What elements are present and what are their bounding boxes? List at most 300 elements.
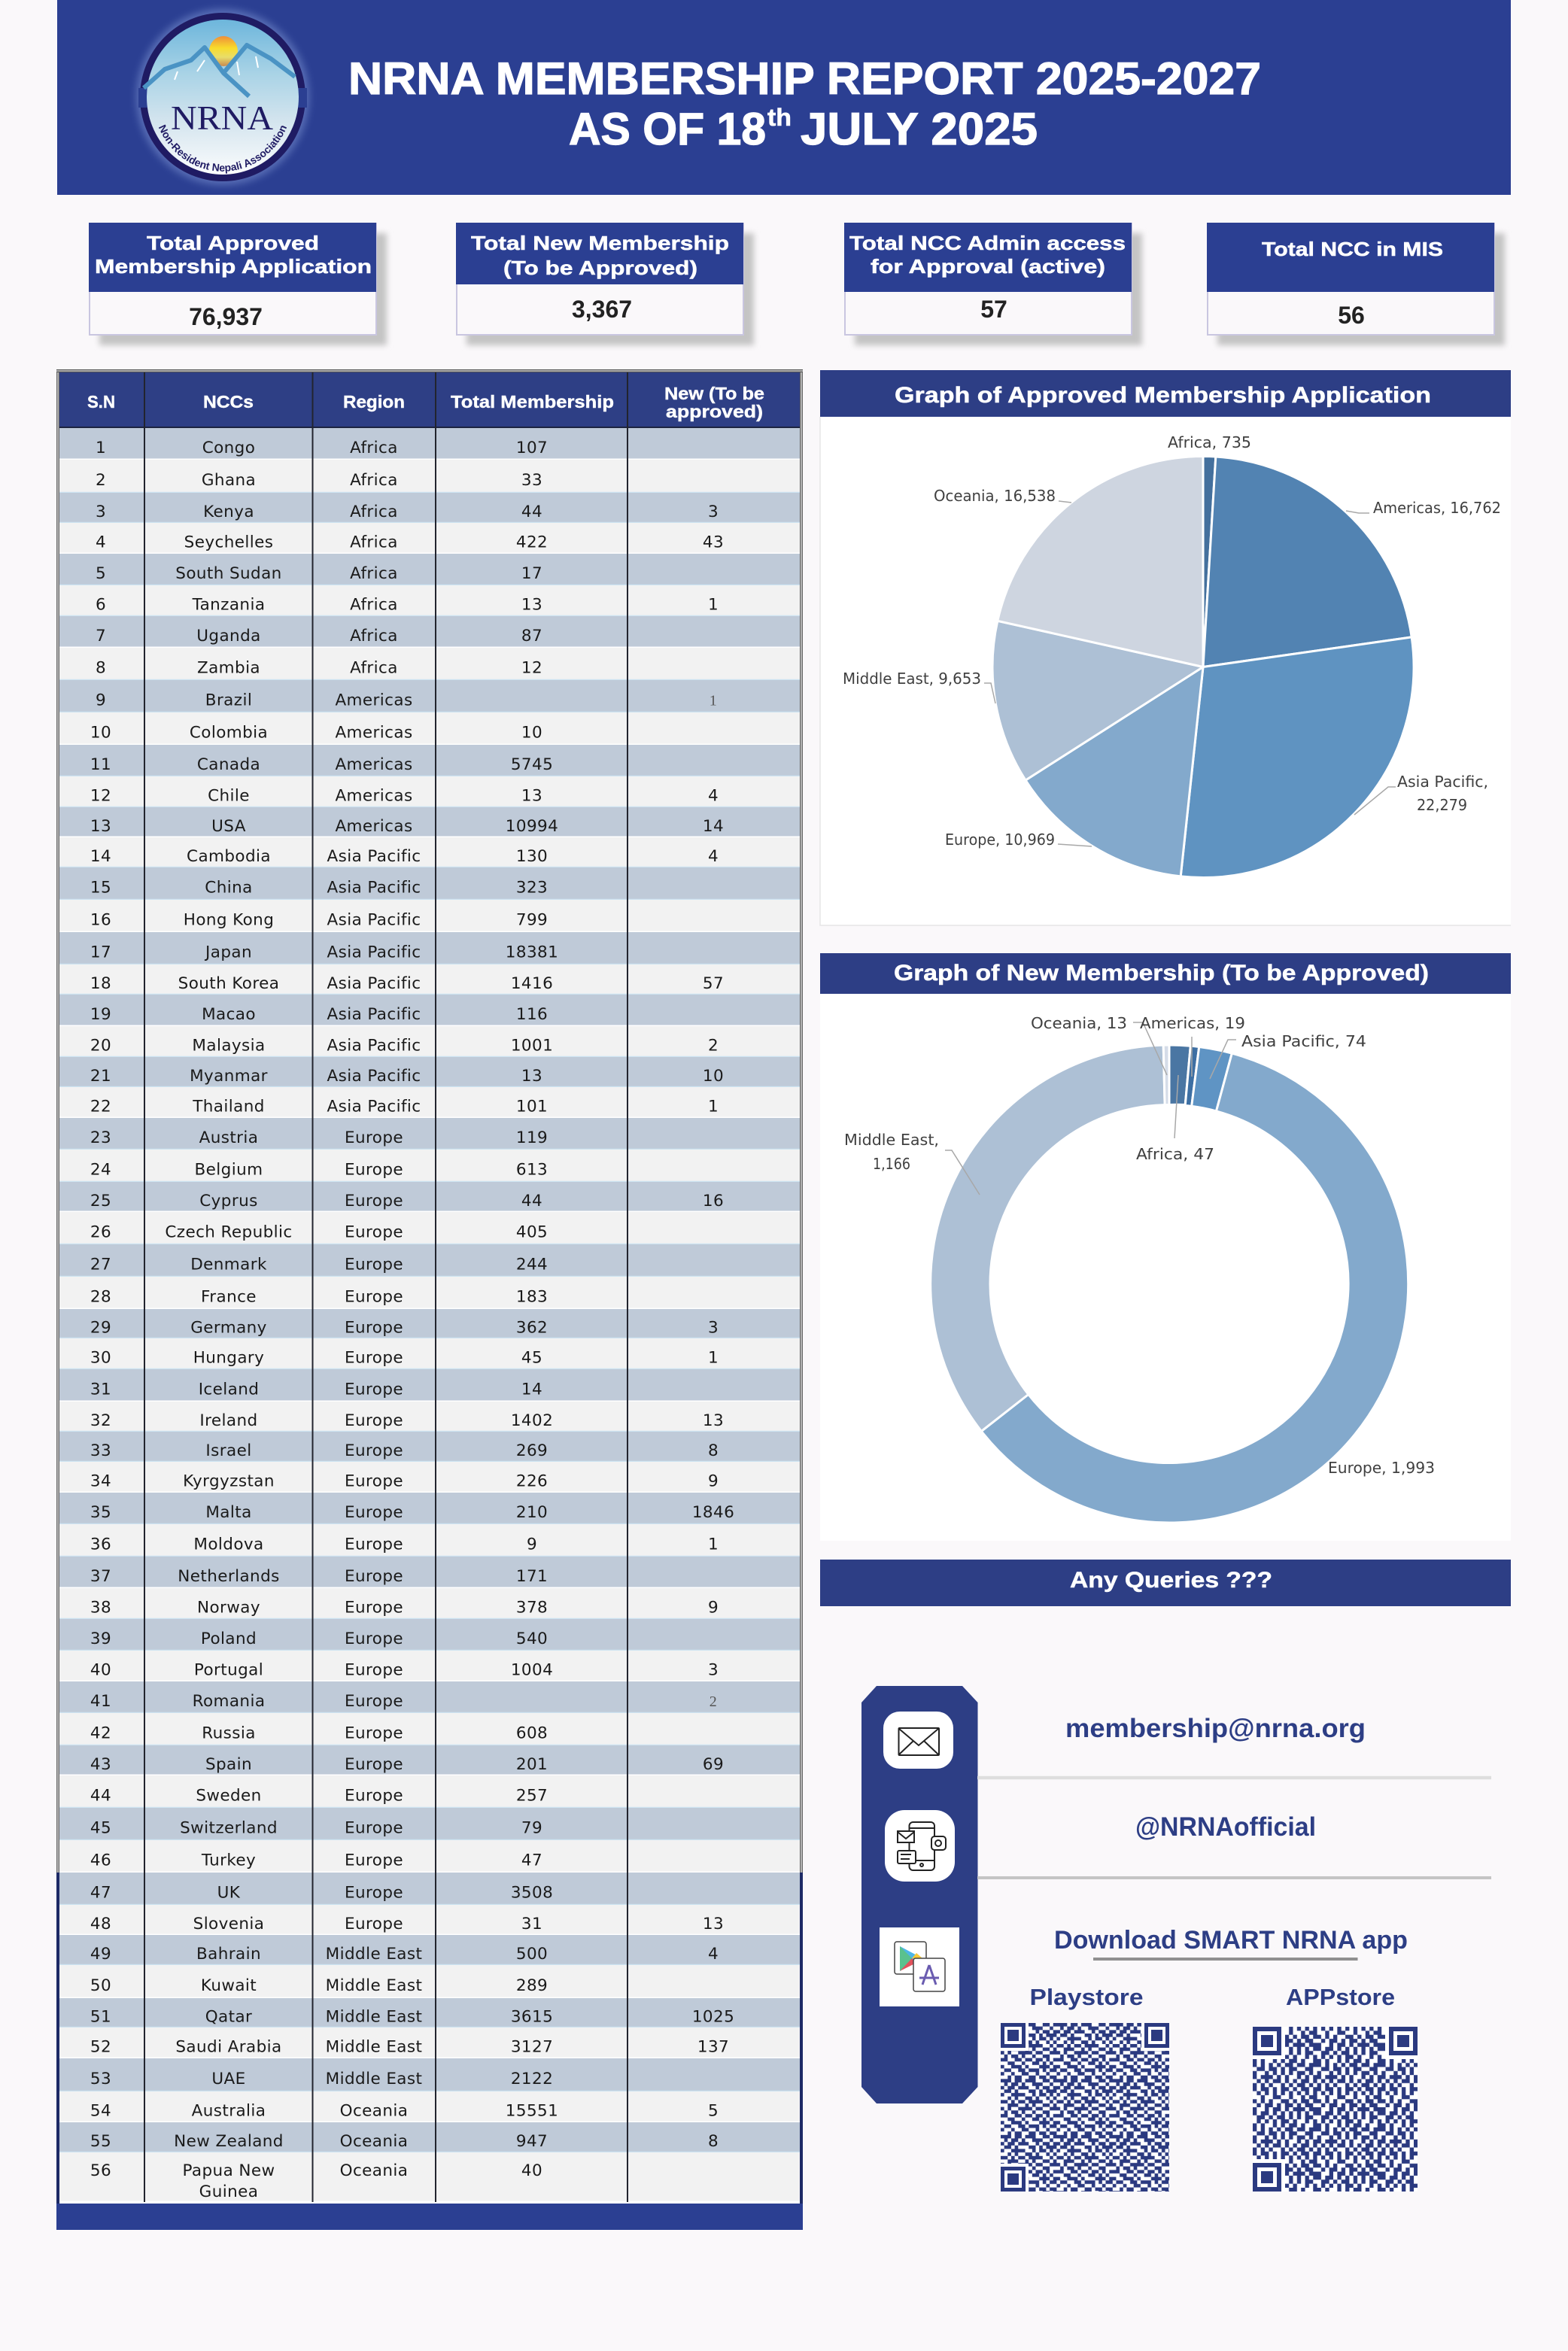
row 47: 3508 xyxy=(511,1884,553,1902)
stat card: NCC admin access: Total NCC Admin access xyxy=(849,232,1126,254)
row 8: Africa xyxy=(350,659,398,677)
row 15: China xyxy=(205,879,253,897)
row 24: 613 xyxy=(516,1160,548,1180)
row 49: Middle East xyxy=(326,1945,422,1964)
row 33: Israel xyxy=(205,1441,252,1460)
row 22: Thailand xyxy=(192,1097,265,1116)
row 36: 9 xyxy=(527,1535,537,1554)
row 1: Africa xyxy=(350,439,398,457)
row 41: Europe xyxy=(345,1692,403,1711)
row 1: Congo xyxy=(202,439,255,457)
row 42: Russia xyxy=(202,1724,256,1742)
stat card: NCC admin access: 57 xyxy=(980,296,1007,323)
row 54: Australia xyxy=(192,2102,266,2120)
row 20: 2 xyxy=(708,1037,719,1055)
row 40: 3 xyxy=(708,1661,719,1679)
row 2: 33 xyxy=(521,471,542,490)
row 4: 4 xyxy=(96,533,106,552)
row 30: Europe xyxy=(345,1348,403,1368)
row 26: Czech Republic xyxy=(165,1223,293,1241)
row 9: Brazil xyxy=(205,691,252,710)
row 9: Americas xyxy=(335,691,413,710)
row 4 xyxy=(59,523,800,554)
row 39: 39 xyxy=(90,1630,111,1648)
row 24: Belgium xyxy=(195,1160,263,1180)
row 35 xyxy=(59,1493,800,1524)
row 32: Ireland xyxy=(199,1411,258,1430)
row 52 xyxy=(59,2028,800,2058)
row 23: Austria xyxy=(199,1128,258,1147)
row 48: 48 xyxy=(90,1915,111,1933)
row 25: 25 xyxy=(90,1192,111,1210)
row 33: 8 xyxy=(708,1441,719,1460)
stat card: total new membership: Total New Membership xyxy=(471,232,729,254)
row 39: 540 xyxy=(516,1630,548,1648)
row 51: 3615 xyxy=(511,2007,553,2027)
donut labels xyxy=(844,1014,1435,1477)
pie labels: Americas, 16,762 xyxy=(1373,499,1501,517)
row 40: 40 xyxy=(90,1661,111,1679)
row 27: 244 xyxy=(516,1255,548,1274)
row 11: 5745 xyxy=(511,755,553,774)
row 20: Asia Pacific xyxy=(327,1037,421,1055)
stat card: NCC in MIS: 56 xyxy=(1338,302,1365,329)
row 38 xyxy=(59,1588,800,1619)
row 32: 13 xyxy=(703,1411,724,1430)
row 5: 5 xyxy=(96,564,106,583)
row 41 xyxy=(59,1681,800,1713)
row 7: 87 xyxy=(521,627,542,645)
row 15: Asia Pacific xyxy=(327,879,421,897)
row 42: Europe xyxy=(345,1724,403,1742)
row 12: Americas xyxy=(335,787,413,805)
row 51: 51 xyxy=(90,2007,111,2027)
row 1: 1 xyxy=(96,439,106,457)
row 43 xyxy=(59,1745,800,1775)
row 6: Africa xyxy=(350,596,398,614)
row 55 xyxy=(59,2122,800,2152)
panel: approved membership graph xyxy=(820,370,1511,925)
row 26 xyxy=(59,1212,800,1244)
row 17: Asia Pacific xyxy=(327,943,421,961)
heading: any queries xyxy=(820,1560,1511,1606)
row 51: Qatar xyxy=(205,2007,252,2027)
row 26: 26 xyxy=(90,1223,111,1241)
row 34: 34 xyxy=(90,1472,111,1491)
row 6: 1 xyxy=(708,596,719,614)
stat card: total new membership: 3,367 xyxy=(572,296,632,323)
row 43: 43 xyxy=(90,1755,111,1774)
row 55: 55 xyxy=(90,2132,111,2151)
row 25: Europe xyxy=(345,1192,403,1210)
row 25: 44 xyxy=(521,1192,542,1210)
row 20: Malaysia xyxy=(192,1037,266,1055)
pie chart: approved membership by region xyxy=(992,456,1414,877)
stat card: NCC in MIS: Total NCC in MIS xyxy=(1262,238,1443,260)
row 10: 10 xyxy=(90,724,111,742)
row 38: 378 xyxy=(516,1598,548,1617)
row 45 xyxy=(59,1808,800,1840)
icon: app stores xyxy=(880,1927,959,2006)
row 12: 12 xyxy=(90,787,111,805)
row 56: 56 xyxy=(90,2161,111,2180)
row 6: 6 xyxy=(96,596,106,614)
row 22: 1 xyxy=(708,1097,719,1116)
row 11: 11 xyxy=(90,755,111,774)
row 30: 45 xyxy=(521,1348,542,1368)
row 18: 57 xyxy=(703,974,724,993)
row 5: Africa xyxy=(350,564,398,583)
row 4: 43 xyxy=(703,533,724,552)
row 32: 32 xyxy=(90,1411,111,1430)
row 16: 16 xyxy=(90,910,111,930)
row 56: Oceania xyxy=(340,2161,408,2180)
row 47: 47 xyxy=(90,1884,111,1902)
row 44: Europe xyxy=(345,1786,403,1806)
table header row: S.N xyxy=(87,392,115,412)
row 5: South Sudan xyxy=(175,564,282,583)
row 8 xyxy=(59,648,800,680)
pie labels: Oceania, 16,538 xyxy=(934,487,1056,505)
row 31: Iceland xyxy=(199,1380,259,1399)
row 19 xyxy=(59,995,800,1026)
row 21: 21 xyxy=(90,1067,111,1086)
row 29: 362 xyxy=(516,1318,548,1338)
row 43: 69 xyxy=(703,1755,724,1774)
row 12: 4 xyxy=(708,787,719,805)
row 21 xyxy=(59,1057,800,1087)
row 19: 19 xyxy=(90,1005,111,1024)
table header row: approved) xyxy=(666,402,763,421)
row 7: Uganda xyxy=(196,627,261,645)
row 24 xyxy=(59,1150,800,1182)
title xyxy=(348,53,1261,154)
row 25: 16 xyxy=(703,1192,724,1210)
row 53: 2122 xyxy=(511,2070,553,2088)
row 45: Switzerland xyxy=(180,1819,278,1837)
table header row xyxy=(59,372,800,429)
row 21: Myanmar xyxy=(190,1067,268,1086)
row 2 xyxy=(59,460,800,493)
row 51: 1025 xyxy=(692,2007,734,2027)
row 37 xyxy=(59,1557,800,1588)
row 54: Oceania xyxy=(340,2102,408,2120)
label: appstore: APPstore xyxy=(1286,1984,1395,2010)
row 48: 31 xyxy=(521,1915,542,1933)
row 51: Middle East xyxy=(326,2007,422,2027)
row 41: 2 xyxy=(710,1693,717,1710)
row 49: 49 xyxy=(90,1945,111,1964)
row 35: 210 xyxy=(516,1503,548,1522)
panel: new membership graph xyxy=(820,953,1511,1541)
row 50: Middle East xyxy=(326,1976,422,1995)
row 23 xyxy=(59,1118,800,1150)
row 23: Europe xyxy=(345,1128,403,1147)
row 20: 1001 xyxy=(511,1037,553,1055)
row 44 xyxy=(59,1775,800,1808)
row 29: Europe xyxy=(345,1318,403,1338)
row 42 xyxy=(59,1713,800,1745)
row 9: 1 xyxy=(710,692,717,709)
row 23: 23 xyxy=(90,1128,111,1147)
row 17 xyxy=(59,932,800,964)
table footer bar xyxy=(56,2204,803,2230)
donut labels: Oceania, 13 xyxy=(1031,1014,1127,1032)
row 44: 44 xyxy=(90,1786,111,1806)
row 56: Papua New xyxy=(183,2161,275,2180)
donut labels: Americas, 19 xyxy=(1140,1014,1245,1032)
row 55: 947 xyxy=(516,2132,548,2151)
row 36 xyxy=(59,1524,800,1557)
row 52: 137 xyxy=(697,2037,729,2057)
row 37: Europe xyxy=(345,1567,403,1586)
row 21: 13 xyxy=(521,1067,542,1086)
row 30: 1 xyxy=(708,1348,719,1368)
row 29 xyxy=(59,1309,800,1338)
row 30: 30 xyxy=(90,1348,111,1368)
row 17: Japan xyxy=(204,943,252,961)
table header row: Region xyxy=(343,392,405,412)
row 54 xyxy=(59,2091,800,2122)
row 33 xyxy=(59,1432,800,1462)
row 14: 14 xyxy=(90,847,111,866)
row 54: 5 xyxy=(708,2102,719,2120)
row 35: 35 xyxy=(90,1503,111,1522)
row 34: 226 xyxy=(516,1472,548,1491)
row 48: Europe xyxy=(345,1915,403,1933)
row 38: 9 xyxy=(708,1598,719,1617)
membership table xyxy=(56,369,803,2230)
row 3: Africa xyxy=(350,503,398,521)
row 35: Europe xyxy=(345,1503,403,1522)
row 25 xyxy=(59,1182,800,1212)
row 18 xyxy=(59,964,800,995)
row 49: 4 xyxy=(708,1945,719,1964)
QR code: appstore xyxy=(1253,2027,1418,2192)
contact: social handle: @NRNAofficial xyxy=(1135,1812,1316,1842)
row 10: Americas xyxy=(335,724,413,742)
row 44: Sweden xyxy=(196,1786,262,1806)
row 15 xyxy=(59,867,800,900)
row 6: 13 xyxy=(521,596,542,614)
row 40: 1004 xyxy=(511,1661,553,1679)
row 46 xyxy=(59,1840,800,1873)
row 48: Slovenia xyxy=(193,1915,264,1933)
contact: email: membership@nrna.org xyxy=(1065,1714,1366,1743)
pie labels: Asia Pacific, xyxy=(1397,773,1488,791)
row 30: Hungary xyxy=(193,1348,264,1368)
logo: NRNA emblem: Non-Resident Nepali Association xyxy=(158,125,287,174)
row 43: 201 xyxy=(516,1755,548,1774)
row 50 xyxy=(59,1965,800,1998)
row 27: 27 xyxy=(90,1255,111,1274)
donut labels: Africa, 47 xyxy=(1136,1145,1214,1163)
row 56: 40 xyxy=(521,2161,542,2180)
row 45: Europe xyxy=(345,1819,403,1837)
table header row: New (To be xyxy=(664,384,764,403)
row 13: Americas xyxy=(335,817,413,836)
row 27 xyxy=(59,1244,800,1277)
header banner xyxy=(57,0,1511,195)
row 26: 405 xyxy=(516,1223,548,1241)
row 7: 7 xyxy=(96,627,106,645)
row 22: 22 xyxy=(90,1097,111,1116)
row 12: 13 xyxy=(521,787,542,805)
row 17: 17 xyxy=(90,943,111,961)
row 18: 1416 xyxy=(511,974,553,993)
row 41: 41 xyxy=(90,1692,111,1711)
row 38: 38 xyxy=(90,1598,111,1617)
row 23: 119 xyxy=(516,1128,548,1147)
row 4: Africa xyxy=(350,533,398,552)
row 22: Asia Pacific xyxy=(327,1097,421,1116)
panel: contact side bar xyxy=(861,1686,978,2103)
row 31: Europe xyxy=(345,1380,403,1399)
title: JULY 2025 xyxy=(801,104,1038,154)
row 39 xyxy=(59,1619,800,1651)
row 50: 50 xyxy=(90,1976,111,1995)
title: NRNA MEMBERSHIP REPORT 2025-2027 xyxy=(348,53,1261,104)
row 14 xyxy=(59,837,800,867)
row 55: New Zealand xyxy=(174,2132,284,2151)
row 39: Europe xyxy=(345,1630,403,1648)
row 54: 54 xyxy=(90,2102,111,2120)
row 21: Asia Pacific xyxy=(327,1067,421,1086)
row 13: 10994 xyxy=(506,817,558,836)
row 35: Malta xyxy=(205,1503,252,1522)
row 13: 14 xyxy=(703,817,724,836)
row 38: Europe xyxy=(345,1598,403,1617)
row 27: Denmark xyxy=(190,1255,267,1274)
row 47 xyxy=(59,1873,800,1905)
row 3: 44 xyxy=(521,503,542,521)
row 12 xyxy=(59,776,800,807)
row 14: 130 xyxy=(516,847,548,866)
row 6 xyxy=(59,585,800,616)
row 15: 15 xyxy=(90,879,111,897)
row 13: USA xyxy=(211,817,246,836)
row 28: 28 xyxy=(90,1288,111,1306)
row 16: Asia Pacific xyxy=(327,910,421,930)
row 33: 269 xyxy=(516,1441,548,1460)
row 56 xyxy=(59,2152,800,2202)
row 12: Chile xyxy=(208,787,250,805)
row 33: 33 xyxy=(90,1441,111,1460)
row 16: Hong Kong xyxy=(184,910,274,930)
row 22 xyxy=(59,1087,800,1118)
donut chart: new membership by region xyxy=(931,1045,1408,1523)
heading: any queries: Any Queries ??? xyxy=(1070,1568,1272,1593)
donut labels: Europe, 1,993 xyxy=(1328,1459,1435,1477)
row 53: UAE xyxy=(211,2070,246,2088)
title: AS OF 18 xyxy=(569,104,766,154)
title: th xyxy=(767,104,792,131)
row 3: 3 xyxy=(96,503,106,521)
row 36: 36 xyxy=(90,1535,111,1554)
row 17: 18381 xyxy=(506,943,558,961)
row 24: 24 xyxy=(90,1160,111,1180)
stat card: NCC in MIS xyxy=(1207,223,1505,345)
divider lines xyxy=(977,1776,1491,1779)
row 36: Europe xyxy=(345,1535,403,1554)
row 31: 31 xyxy=(90,1380,111,1399)
row 52: 3127 xyxy=(511,2037,553,2057)
row 11: Americas xyxy=(335,755,413,774)
donut labels: 1,166 xyxy=(873,1155,910,1173)
row 46: 47 xyxy=(521,1851,542,1870)
logo: NRNA emblem xyxy=(133,6,312,188)
row 8: Zambia xyxy=(197,659,260,677)
pie labels: Middle East, 9,653 xyxy=(843,670,981,688)
stat card: total approved: Membership Application xyxy=(95,255,372,278)
row 47: UK xyxy=(217,1884,241,1902)
pie labels: Europe, 10,969 xyxy=(945,831,1055,849)
row 46: Europe xyxy=(345,1851,403,1870)
icon: mail xyxy=(883,1712,953,1769)
logo: NRNA emblem: NRNA xyxy=(171,99,274,137)
row 52: Saudi Arabia xyxy=(175,2037,282,2057)
row 29: Germany xyxy=(190,1318,267,1338)
row 13: 13 xyxy=(90,817,111,836)
row 55: Oceania xyxy=(340,2132,408,2151)
row 29: 29 xyxy=(90,1318,111,1338)
row 31: 14 xyxy=(521,1380,542,1399)
row 6: Tanzania xyxy=(192,596,265,614)
stat card: total approved: Total Approved xyxy=(147,232,319,254)
row 15: 323 xyxy=(516,879,548,897)
row 16: 799 xyxy=(516,910,548,930)
row 34: Europe xyxy=(345,1472,403,1491)
row 43: Europe xyxy=(345,1755,403,1774)
heading: new membership graph xyxy=(820,953,1511,994)
row 18: Asia Pacific xyxy=(327,974,421,993)
row 10: Colombia xyxy=(190,724,268,742)
row 2: Ghana xyxy=(202,471,256,490)
row 27: Europe xyxy=(345,1255,403,1274)
row 3: 3 xyxy=(708,503,719,521)
row 31 xyxy=(59,1369,800,1402)
row 28 xyxy=(59,1277,800,1309)
row 2: 2 xyxy=(96,471,106,490)
row 20: 20 xyxy=(90,1037,111,1055)
row 10: 10 xyxy=(521,724,542,742)
contact: download heading: Download SMART NRNA app xyxy=(1054,1926,1408,1955)
row 7 xyxy=(59,616,800,648)
row 7: Africa xyxy=(350,627,398,645)
row 21: 10 xyxy=(703,1067,724,1086)
row 36: 1 xyxy=(708,1535,719,1554)
row 48 xyxy=(59,1905,800,1935)
QR code: playstore xyxy=(1001,2023,1169,2192)
row 40: Europe xyxy=(345,1661,403,1679)
pie labels xyxy=(843,433,1501,849)
row 36: Moldova xyxy=(193,1535,264,1554)
row 11 xyxy=(59,745,800,776)
row 34: 9 xyxy=(708,1472,719,1491)
pie labels: 22,279 xyxy=(1417,796,1467,814)
row 14: 4 xyxy=(708,847,719,866)
row 28: Europe xyxy=(345,1288,403,1306)
stat card: total new membership xyxy=(456,223,754,345)
row 1 xyxy=(59,428,800,460)
row 51 xyxy=(59,1998,800,2028)
row 53 xyxy=(59,2058,800,2091)
stat card: NCC admin access: for Approval (active) xyxy=(871,255,1105,278)
table header row: NCCs xyxy=(203,392,254,412)
row 56: Guinea xyxy=(199,2182,258,2201)
row 13 xyxy=(59,807,800,837)
icon: social phone xyxy=(885,1810,955,1882)
